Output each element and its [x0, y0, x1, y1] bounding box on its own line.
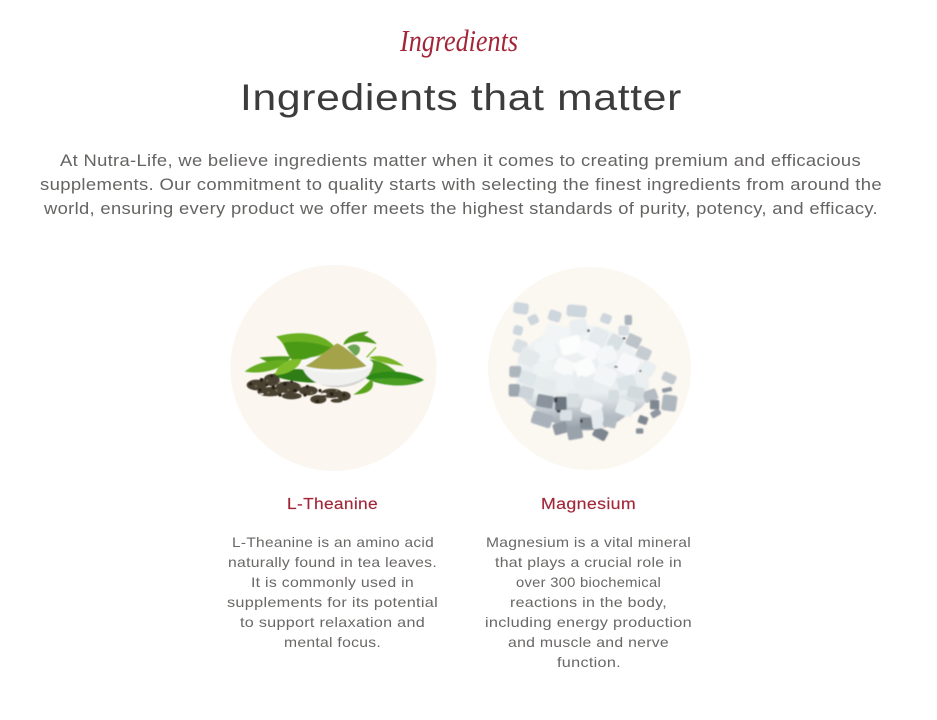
- description: L-Theanine: mental focus.: [284, 634, 381, 650]
- description: L-Theanine: to support relaxation and: [240, 614, 425, 630]
- heading: Magnesium: Magnesium: [541, 496, 636, 513]
- description: Magnesium: and muscle and nerve: [508, 634, 669, 650]
- intro paragraph: world, ensuring every product we offer meets the highest standards of purity, potency, and efficacy.: [43, 200, 878, 218]
- description: L-Theanine: [227, 534, 438, 650]
- title: Ingredients that matter: [240, 77, 682, 118]
- description: L-Theanine: L-Theanine is an amino acid: [232, 534, 434, 550]
- panel: Magnesium: [485, 267, 692, 670]
- eyebrow: Ingredients script: Ingredients: [399, 23, 518, 58]
- description: L-Theanine: It is commonly used in: [251, 574, 414, 590]
- description: Magnesium: reactions in the body,: [510, 594, 667, 610]
- intro paragraph: supplements. Our commitment to quality starts with selecting the finest ingredients from around the: [40, 176, 882, 194]
- description: L-Theanine: supplements for its potential: [227, 594, 438, 610]
- image: magnesium crystals: [488, 267, 691, 470]
- description: Magnesium: [485, 534, 692, 670]
- description: Magnesium: function.: [557, 654, 621, 670]
- heading: L-Theanine: L-Theanine: [287, 496, 378, 513]
- intro paragraph: At Nutra-Life, we believe ingredients matter when it comes to creating premium and efficacious: [60, 152, 861, 170]
- description: Magnesium: that plays a crucial role in: [495, 554, 682, 570]
- description: Magnesium: over 300 biochemical: [516, 574, 661, 590]
- image: tea leaves and powder bowl: [230, 265, 436, 471]
- intro paragraph: [40, 152, 882, 218]
- description: Magnesium: including energy production: [485, 614, 692, 630]
- description: L-Theanine: naturally found in tea leaves.: [228, 554, 437, 570]
- panel: L-Theanine: [227, 265, 438, 650]
- description: Magnesium: Magnesium is a vital mineral: [486, 534, 691, 550]
